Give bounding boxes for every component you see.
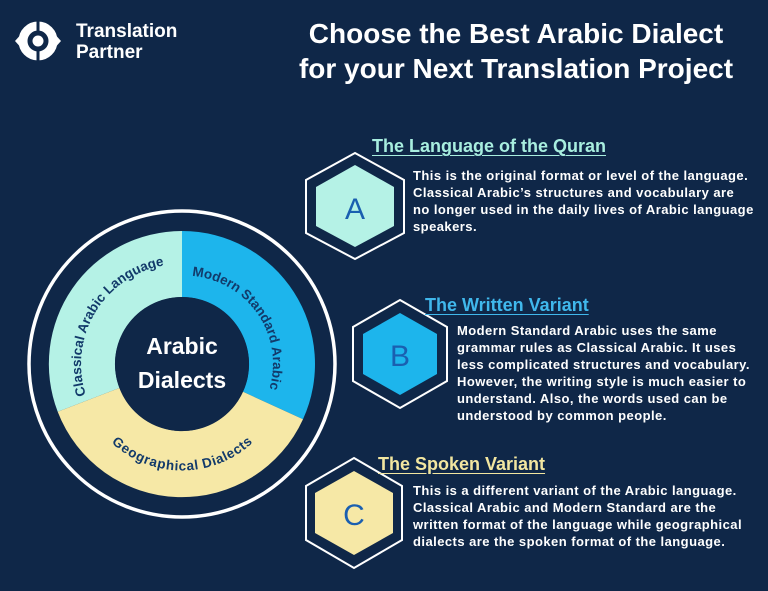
title: for your Next Translation Project [299,53,733,84]
section A title: The Language of the Quran [372,136,606,156]
hexagon A [305,152,405,260]
hexagon A: A [345,193,365,226]
logo text: Translation [76,21,177,42]
donut chart: Dialects [138,367,226,393]
section B text: grammar rules as Classical Arabic. It uses [457,340,736,355]
label: geographical: Geographical Dialects [113,438,252,471]
hexagon B [352,298,448,410]
donut chart [27,209,337,519]
label: modern: Modern Standard Arabic [192,266,282,390]
section B text [457,323,750,423]
logo [15,21,177,63]
title [299,18,733,84]
section A text: no longer used in the daily lives of Arabic language [413,202,754,217]
section A text: This is the original format or level of the language. [413,168,748,183]
section C text [413,483,742,549]
section C text: written format of the language while geographical [413,517,742,532]
section C text: Classical Arabic and Modern Standard are the [413,500,716,515]
section A text: Classical Arabic’s structures and vocabulary are [413,185,734,200]
segment: classical [49,231,182,412]
title: Choose the Best Arabic Dialect [309,18,723,49]
section B text: understand. Also, the words used can be [457,391,728,406]
section B text: understood by common people. [457,408,667,423]
center label: Arabic [146,333,218,359]
section A text: speakers. [413,219,477,234]
logo text: Partner [76,42,143,63]
segment: modern [182,231,315,419]
segment: geographical [58,388,303,497]
hexagon B: B [390,340,410,373]
section B text: Modern Standard Arabic uses the same [457,323,717,338]
section B text: However, the writing style is much easier to [457,374,746,389]
section C text: This is a different variant of the Arabic language. [413,483,737,498]
section C title: The Spoken Variant [378,454,545,474]
icon: logo mark [15,22,61,60]
hexagon C: C [343,499,365,532]
logo text [76,21,177,63]
section A text [413,168,754,234]
section B text: less complicated structures and vocabulary. [457,357,750,372]
section C text: dialects are the spoken format of the language. [413,534,725,549]
hexagon C [305,456,403,570]
section B title: The Written Variant [425,295,589,315]
label: classical: Classical Arabic Language [71,258,164,396]
